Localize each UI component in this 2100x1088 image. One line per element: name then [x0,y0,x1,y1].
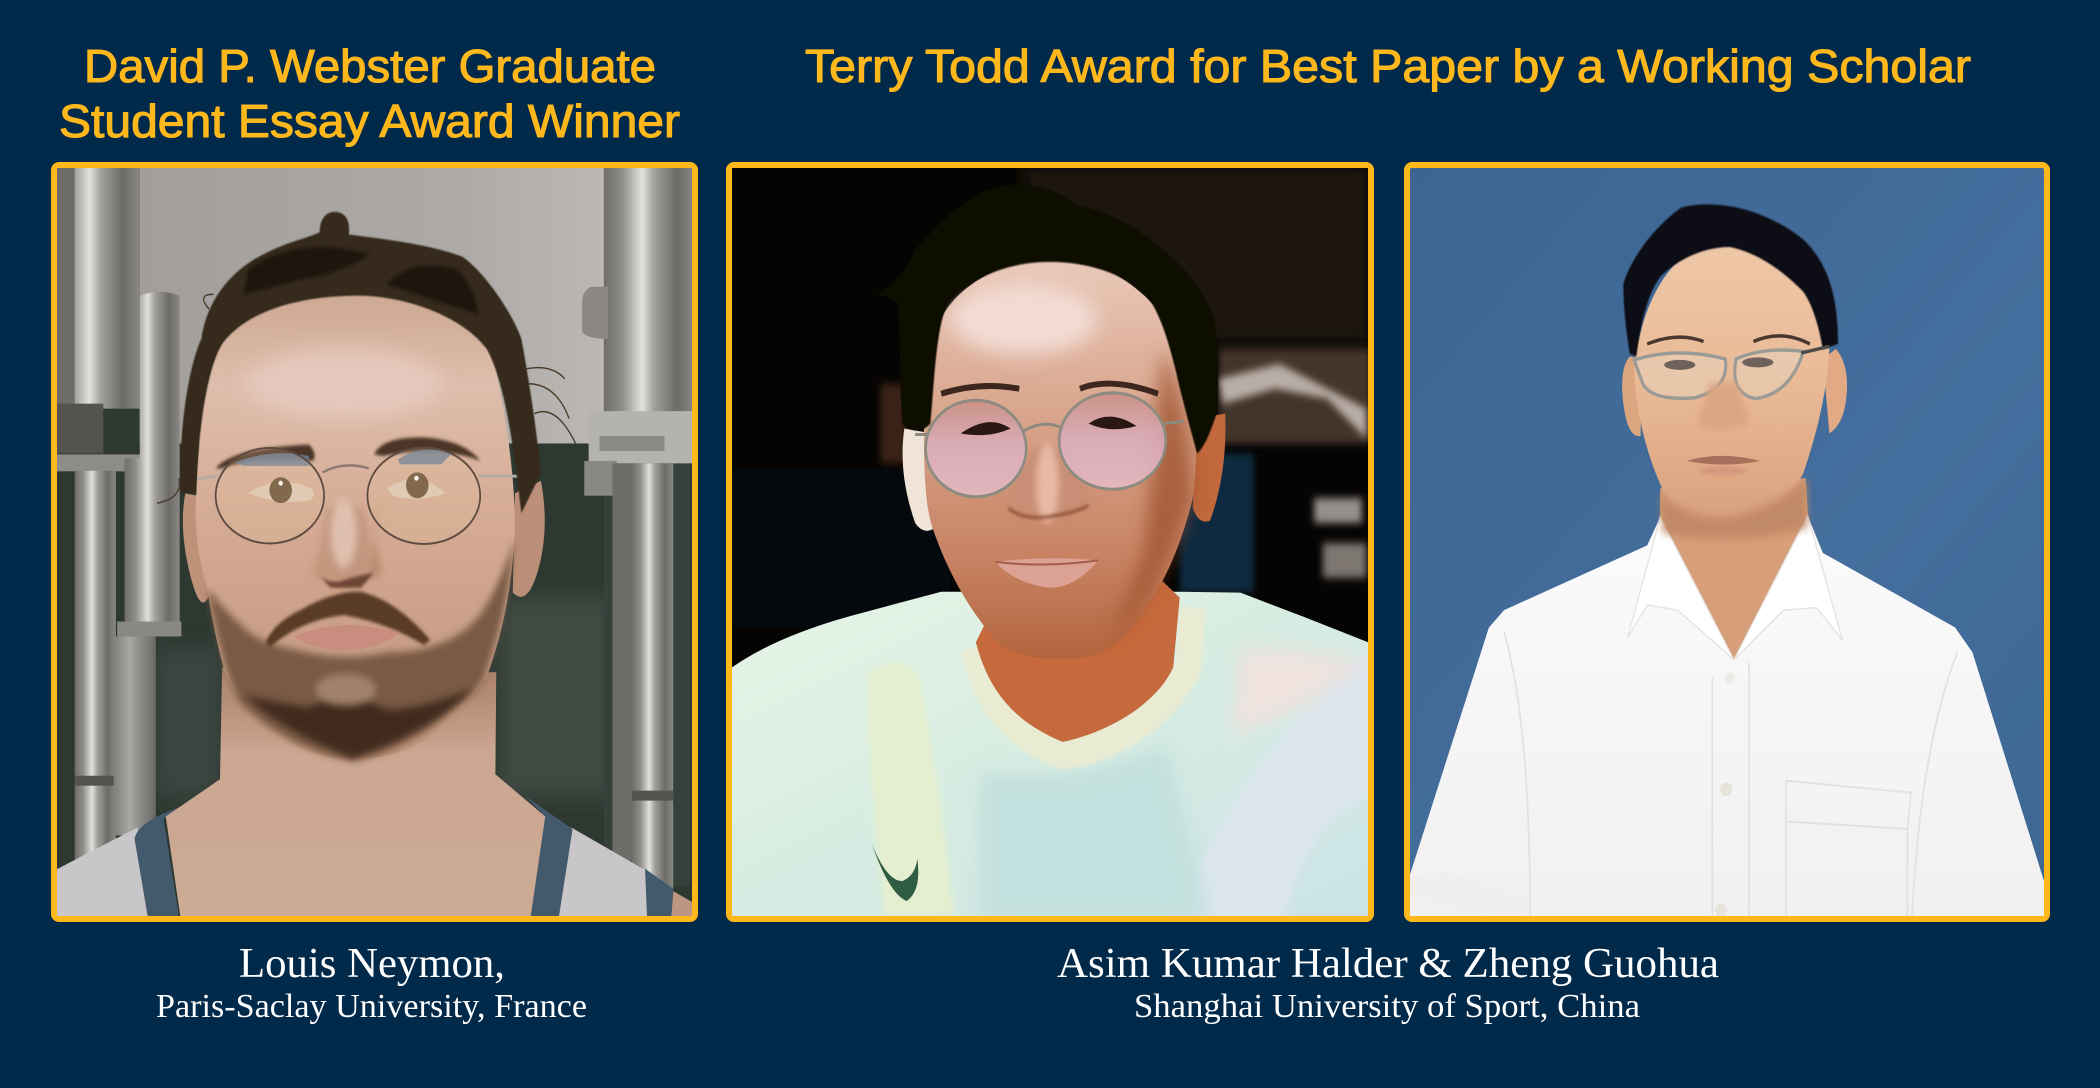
panel: portrait of Zheng Guohua [1407,165,2047,921]
ears [1622,349,1847,436]
ears [183,481,545,603]
blurred restaurant background [729,165,1375,667]
neck [976,573,1180,742]
wall and chalkboard [140,168,690,886]
nose [1697,384,1749,430]
caption: Louis Neymon: Paris-Saclay University, France [156,988,587,1025]
hair [1623,204,1838,356]
beard [207,538,515,761]
lips [995,558,1098,588]
heading: David P. Webster award: David P. Webster Graduate [84,40,656,92]
face [1634,246,1830,498]
heading: David P. Webster award: Student Essay Award Winner [59,95,680,147]
panel: portrait of Asim Kumar Halder [729,165,1375,921]
caption: Asim Kumar Halder and Zheng Guohua: Shanghai University of Sport, China [1134,988,1640,1025]
moustache [266,592,430,647]
neck [1660,478,1810,660]
eyes and brows [1647,336,1810,370]
eyes [941,384,1158,435]
eyebrows [216,437,480,468]
mouth [1686,456,1760,465]
hair [874,184,1218,453]
eyes [248,472,446,503]
neck [166,667,545,921]
lips [294,625,400,650]
hair [157,212,576,513]
shirt [1409,516,2044,921]
glasses [1634,346,1829,399]
face [924,257,1196,659]
caption: Asim Kumar Halder and Zheng Guohua [1057,941,1719,1025]
glasses [915,393,1184,497]
caption: Louis Neymon: Louis Neymon, [239,941,505,987]
caption: Louis Neymon [156,941,587,1025]
t-shirt [729,592,1375,921]
nose [1008,506,1089,518]
face shading [950,284,1193,647]
ears [903,414,1226,531]
neck shadow [1660,478,1808,539]
panel: portrait of Louis Neymon [53,165,695,921]
cheek and forehead shading [244,349,443,585]
face [196,292,515,759]
glasses [197,447,519,544]
forearm [1409,901,1456,916]
caption: Asim Kumar Halder and Zheng Guohua: Asim Kumar Halder & Zheng Guohua [1057,941,1719,987]
singlet [53,797,695,921]
heading: David P. Webster award [59,40,680,147]
nose [318,573,374,588]
heading: Terry Todd award: Terry Todd Award for Best Paper by a Working Scholar [805,40,1971,92]
weight bars [53,165,695,891]
